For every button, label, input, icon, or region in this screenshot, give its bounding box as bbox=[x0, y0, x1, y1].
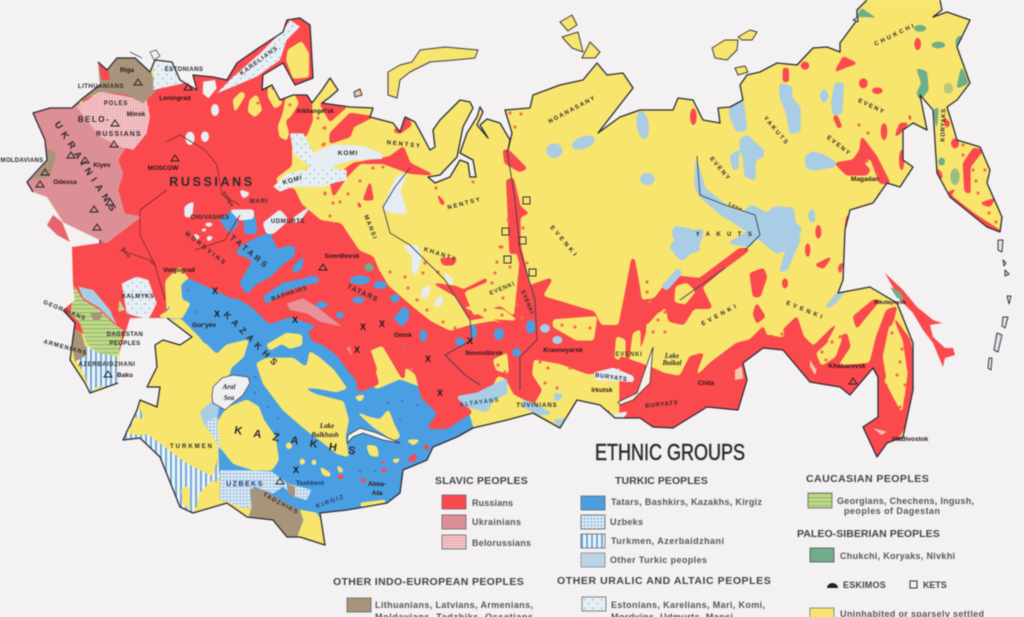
Kolguev bbox=[354, 89, 362, 97]
Wrangel bay marker bbox=[853, 17, 858, 22]
legend group: Paleo-Siberian peoples: PALEO-SIBERIAN PEOPLES bbox=[797, 528, 940, 540]
legend group: Caucasian peoples: CAUCASIAN PEOPLES bbox=[806, 473, 929, 485]
map labels: peoples and cities: BELO- bbox=[78, 115, 110, 124]
map labels: peoples and cities: Baikal bbox=[661, 359, 682, 367]
legend group: Slavic peoples: Belorussians bbox=[472, 538, 531, 548]
Turkmen stripes bbox=[123, 407, 220, 513]
map labels: peoples and cities: Vladivostok bbox=[892, 436, 929, 443]
map labels: peoples and cities: BURYATS bbox=[645, 400, 679, 410]
map labels: peoples and cities: PEOPLES bbox=[109, 341, 141, 347]
X marks: X bbox=[425, 354, 431, 364]
legend group: Turkic peoples: Other Turkic peoples bbox=[610, 555, 707, 565]
Ukrainians pink bbox=[13, 20, 347, 320]
Saaremaa and Baltic islands bbox=[130, 50, 160, 60]
southern Siberia and Far East red belt bbox=[620, 228, 917, 460]
legend group: Paleo-Siberian peoples: Chukchi, Koryaks, Nivkhi bbox=[840, 551, 955, 561]
map labels: peoples and cities: UKRAINIANS bbox=[52, 120, 121, 218]
Ladoga coast stroke and rivers bbox=[120, 135, 240, 300]
map labels: peoples and cities: MANSI bbox=[362, 214, 378, 241]
Khanty light strips bbox=[403, 245, 453, 307]
Kazakh steppe and Central Asia layers bbox=[68, 280, 440, 547]
Kalmyk check bbox=[122, 277, 157, 320]
Ob and Volga blue lakes in the red zone bbox=[287, 245, 633, 428]
Komi and Khanty light patches bbox=[307, 145, 407, 213]
islands bbox=[47, 15, 1011, 370]
X marks: X bbox=[214, 309, 220, 319]
X marks: X bbox=[360, 322, 366, 332]
map labels: peoples and cities: NENTSY bbox=[447, 197, 482, 211]
map labels: peoples and cities: KOMI bbox=[338, 150, 358, 157]
map labels: peoples and cities: KHANTY bbox=[423, 247, 458, 263]
legend group: other Uralic and Altaic peoples: OTHER URALIC AND ALTAIC PEOPLES bbox=[557, 575, 771, 587]
map labels: peoples and cities: YAKUTS bbox=[696, 232, 758, 238]
map labels: peoples and cities: Omsk bbox=[394, 332, 412, 339]
map labels: peoples and cities: MORDVINS bbox=[183, 231, 228, 267]
map labels: peoples and cities: Balkhash bbox=[310, 431, 339, 439]
Estonian and Karelian light check bbox=[153, 20, 347, 192]
legend group: Turkic peoples: Uzbeks bbox=[610, 517, 643, 527]
legend group: Caucasian peoples: peoples of Dagestan bbox=[844, 506, 940, 516]
map labels: peoples and cities bbox=[1, 22, 948, 516]
Kuril Islands bbox=[988, 240, 1011, 370]
legend group: other Indo-European peoples bbox=[333, 576, 533, 617]
map labels: peoples and cities: Nikolayevsk bbox=[874, 300, 907, 306]
map labels: peoples and cities: Gur'yev bbox=[192, 322, 216, 329]
map labels: peoples and cities: MOLDAVIANS bbox=[1, 158, 43, 164]
map labels: peoples and cities: EVENY bbox=[857, 98, 886, 116]
X marks bbox=[212, 286, 473, 475]
map labels: peoples and cities: Baku bbox=[117, 372, 133, 379]
map labels: peoples and cities: EVENKI bbox=[701, 303, 740, 328]
Crimea bbox=[47, 215, 70, 242]
map labels: peoples and cities: Lena bbox=[727, 201, 743, 213]
map labels: peoples and cities: LITHUANIANS bbox=[78, 84, 124, 90]
legend group: Paleo-Siberian peoples bbox=[797, 528, 955, 562]
map labels: peoples and cities: TUVINIANS bbox=[516, 403, 558, 409]
legend group: Slavic peoples bbox=[435, 475, 531, 549]
map labels: peoples and cities: EVENY bbox=[825, 135, 852, 158]
map labels: peoples and cities: KAZAKHS bbox=[222, 309, 283, 370]
map labels: peoples and cities: Aral bbox=[222, 383, 235, 391]
legend group: other Indo-European peoples: OTHER INDO-EUROPEAN PEOPLES bbox=[333, 576, 524, 588]
X marks: X bbox=[212, 286, 218, 296]
Tadzhik brown bbox=[248, 483, 303, 538]
Siberian rivers bbox=[383, 150, 760, 390]
New Siberian Islands bbox=[712, 30, 757, 75]
map labels: peoples and cities: Alma- bbox=[368, 481, 386, 488]
map labels: peoples and cities: RUSSIANS bbox=[169, 175, 255, 189]
Lake Balkhash bbox=[347, 428, 400, 443]
map labels: peoples and cities: MARI bbox=[250, 199, 268, 205]
X marks: X bbox=[467, 336, 473, 346]
map labels: peoples and cities: NENTSY bbox=[386, 140, 422, 150]
map labels: peoples and cities: MOSCOW bbox=[148, 165, 179, 172]
map labels: peoples and cities: KALMYKS bbox=[122, 294, 154, 300]
map labels: peoples and cities: Minsk bbox=[127, 111, 146, 118]
legend group: Slavic peoples: Russians bbox=[472, 498, 513, 508]
Altay light blue bbox=[457, 378, 568, 428]
legend group: Slavic peoples: SLAVIC PEOPLES bbox=[435, 475, 528, 487]
map labels: peoples and cities: TATARS bbox=[346, 284, 380, 304]
map labels: peoples and cities: Arkhangel'sk bbox=[296, 109, 334, 115]
map labels: peoples and cities: Don bbox=[120, 247, 132, 260]
map labels: peoples and cities: BASHKIRS bbox=[271, 285, 309, 303]
map labels: peoples and cities: Sea bbox=[224, 394, 235, 402]
legend group: Turkic peoples bbox=[581, 475, 762, 567]
map labels: peoples and cities: KOMI bbox=[282, 174, 303, 187]
Kola interior and northern yellow bbox=[233, 42, 308, 140]
legend: Eskimos and Kets symbols: ESKIMOS bbox=[843, 580, 886, 590]
map labels: peoples and cities: EVENKI bbox=[489, 281, 516, 297]
Kazakh blue region bbox=[160, 270, 473, 523]
map labels: peoples and cities: Magadan bbox=[851, 176, 879, 183]
map labels: peoples and cities: ESTONIANS bbox=[165, 67, 203, 73]
legend group: other Uralic and Altaic peoples: Estonians, Karelians, Mari, Komi, bbox=[611, 600, 765, 610]
Caucasus bbox=[70, 287, 123, 358]
Lake Baikal bbox=[618, 347, 653, 405]
legend group: Turkic peoples: TURKIC PEOPLES bbox=[615, 475, 708, 487]
red dots: scattered Russian settlement bbox=[258, 88, 996, 412]
legend group: other Indo-European peoples: Lithuanians, Latvians, Armenians, bbox=[375, 600, 533, 610]
map labels: peoples and cities: Tashkent bbox=[296, 480, 325, 487]
map labels: peoples and cities: GEORGIANS bbox=[42, 300, 87, 322]
map labels: peoples and cities: Volgograd bbox=[163, 267, 195, 274]
map labels: peoples and cities: TADZHIKS bbox=[262, 492, 299, 516]
map labels: peoples and cities: UDMURTS bbox=[271, 219, 305, 225]
red belts and streaks over yellow bbox=[320, 100, 528, 253]
X marks: X bbox=[293, 465, 299, 475]
Uzbek check bbox=[220, 470, 312, 508]
legend group: Caucasian peoples: Georgians, Chechens, Ingush, bbox=[837, 496, 974, 506]
map labels: peoples and cities: Lake bbox=[319, 422, 334, 430]
legend group: Turkic peoples: Turkmen, Azerbaidzhani bbox=[611, 536, 724, 546]
map labels: peoples and cities: Novosibirsk bbox=[465, 350, 503, 357]
Kets squares bbox=[502, 197, 536, 276]
map labels: peoples and cities: ARMENIANS bbox=[43, 339, 88, 357]
map labels: peoples and cities: Chita bbox=[698, 380, 715, 387]
Tatar blue lobes and Chuvash, Mari patches bbox=[220, 210, 317, 303]
map labels: peoples and cities: RUSSIANS bbox=[96, 131, 142, 138]
map labels: peoples and cities: AZERBAIDZHANI bbox=[78, 362, 136, 368]
map labels: peoples and cities: Leningrad bbox=[159, 95, 191, 102]
map labels: peoples and cities: Volga bbox=[220, 191, 235, 208]
Far East red patches and Yakut lakes bbox=[680, 8, 1002, 257]
legend: Eskimos and Kets symbols: KETS bbox=[923, 580, 947, 590]
Sakhalin bbox=[885, 273, 955, 367]
map labels: peoples and cities: Sverdlovsk bbox=[325, 253, 360, 260]
map labels: peoples and cities: TATARS bbox=[228, 233, 271, 271]
X marks: X bbox=[379, 319, 385, 329]
map labels: peoples and cities: EVENKI bbox=[549, 225, 579, 260]
map labels: peoples and cities: Irkutsk bbox=[591, 387, 613, 394]
map labels: peoples and cities: POLES bbox=[104, 101, 128, 107]
legend: Eskimos and Kets symbols bbox=[827, 580, 947, 590]
map labels: peoples and cities: DAGESTAN bbox=[107, 332, 143, 338]
legend group: Turkic peoples: Tatars, Bashkirs, Kazakhs, Kirgiz bbox=[611, 497, 762, 507]
map labels: peoples and cities: EVENY bbox=[708, 156, 731, 183]
map labels: peoples and cities: Ata bbox=[372, 490, 383, 497]
map labels: peoples and cities: EVENKI bbox=[785, 301, 826, 322]
map labels: peoples and cities: EVENKI bbox=[519, 290, 534, 315]
map labels: peoples and cities: TURKMEN bbox=[170, 444, 214, 450]
map labels: peoples and cities: KORYAKS bbox=[940, 108, 948, 142]
X marks: X bbox=[437, 388, 443, 398]
inland waters: Aral Sea bbox=[212, 375, 250, 410]
map labels: peoples and cities: Krasnoyarsk bbox=[543, 347, 583, 354]
map labels: peoples and cities: EVENKI bbox=[615, 352, 643, 358]
map labels: peoples and cities: BURYATS bbox=[595, 373, 628, 383]
map labels: peoples and cities: KIRGIZ bbox=[316, 494, 346, 510]
map labels: peoples and cities: Odessa bbox=[53, 179, 77, 186]
map labels: peoples and cities: Khabarovsk bbox=[828, 363, 866, 370]
map labels: peoples and cities: Riga bbox=[120, 67, 134, 74]
Pink patches bbox=[287, 298, 422, 370]
Chukchi and Koryak green areas bbox=[857, 8, 968, 133]
map labels: peoples and cities: UZBEKS bbox=[226, 481, 264, 488]
map labels: peoples and cities: ALTAYANS bbox=[459, 397, 500, 409]
map labels: peoples and cities: KARELIANS bbox=[239, 45, 280, 77]
map labels: peoples and cities: Kiyev bbox=[93, 162, 111, 169]
Buryat light patches bbox=[593, 368, 633, 420]
map labels: peoples and cities: CHUVASHES bbox=[190, 215, 230, 221]
blue dots: scattered Kazakh settlement bbox=[188, 290, 417, 471]
map labels: peoples and cities: NGANASANY bbox=[548, 95, 597, 125]
legend group: Caucasian peoples bbox=[806, 473, 974, 516]
settlement symbols: triangles bbox=[36, 79, 857, 484]
map labels: peoples and cities: Lake bbox=[664, 352, 679, 360]
map labels: peoples and cities: CHUKCHI bbox=[874, 22, 917, 48]
X marks: X bbox=[292, 315, 298, 325]
other Turkic near the Aral bbox=[200, 400, 220, 447]
Severnaya Zemlya bbox=[560, 15, 600, 58]
X marks: X bbox=[354, 345, 360, 355]
title: ETHNIC GROUPS: ETHNIC GROUPS bbox=[595, 439, 745, 465]
Russian red main region bbox=[60, 10, 747, 427]
Novaya Zemlya bbox=[388, 47, 478, 98]
map labels: peoples and cities: KAZAKHS bbox=[233, 424, 368, 460]
legend group: Slavic peoples: Ukrainians bbox=[472, 517, 521, 527]
Ladoga and small lakes bbox=[203, 80, 217, 98]
legend bbox=[333, 439, 984, 617]
Yakut lobes and Taymyr lakes bbox=[662, 230, 845, 308]
map labels: peoples and cities: YAKUTS bbox=[762, 116, 790, 147]
legend group: other Uralic and Altaic peoples bbox=[557, 575, 771, 617]
